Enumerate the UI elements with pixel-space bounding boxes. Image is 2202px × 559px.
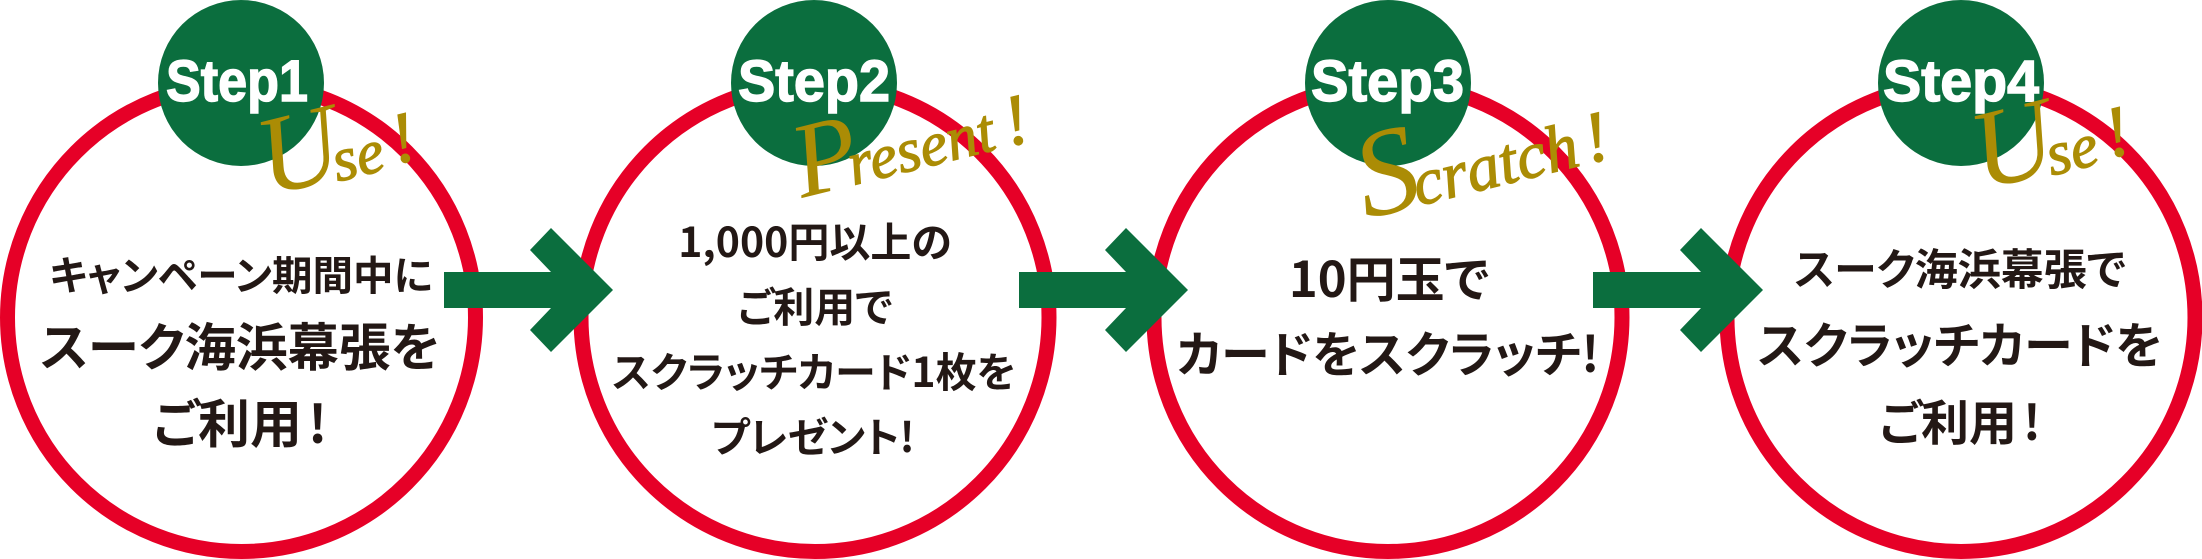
badge label: Step1: Step1: [166, 49, 308, 114]
panel: step 1: [8, 0, 476, 552]
panel: step 4: [1727, 0, 2195, 552]
body text 2: 1,000円以上の: [678, 209, 952, 269]
body text 3: カードをスクラッチ!: [1177, 316, 1599, 387]
body text 4: ご利用!: [1879, 384, 2041, 454]
script: Use!: U: [244, 79, 358, 220]
badge label: Step2: Step2: [738, 49, 890, 114]
red ring 2: [581, 84, 1049, 552]
body text 2: プレゼント!: [711, 404, 915, 464]
script: Use!: se: [324, 117, 391, 195]
red ring 1: [8, 84, 476, 552]
green badge 3: [1305, 0, 1471, 166]
green badge 1: [158, 0, 324, 166]
body text 1: スーク海浜幕張を: [40, 306, 440, 381]
green badge 2: [731, 0, 897, 166]
body text 3: [1177, 241, 1599, 387]
body text 4: スクラッチカードを: [1758, 307, 2162, 378]
script: Use!: !: [2095, 90, 2138, 173]
body text 2: スクラッチカード1枚を: [612, 339, 1016, 399]
script: Use!: se: [2038, 111, 2105, 189]
body text 4: [1758, 236, 2162, 454]
body text 1: キャンペーン期間中に: [49, 243, 433, 302]
body text 2: [612, 209, 1016, 464]
panel: step 3: [1154, 0, 1622, 552]
red ring 4: [1727, 84, 2195, 552]
body text 1: ご利用!: [153, 383, 327, 458]
body text 3: 10円玉で: [1289, 241, 1489, 312]
badge label: Step4: Step4: [1883, 49, 2039, 114]
script: Scratch!: Scratch!: [1339, 51, 1620, 245]
script: Use!: U: [1958, 73, 2072, 214]
body text 1: [40, 243, 440, 458]
body text 4: スーク海浜幕張で: [1794, 236, 2126, 298]
green badge 4: [1878, 0, 2044, 166]
arrow 2: [1019, 228, 1188, 352]
panel: step 2: [581, 0, 1049, 552]
body text 2: ご利用で: [738, 274, 892, 334]
arrow 1: [444, 228, 613, 352]
arrow 3: [1593, 228, 1763, 352]
script: Use!: !: [381, 96, 424, 179]
red ring 3: [1154, 84, 1622, 552]
badge label: Step3: Step3: [1311, 49, 1464, 114]
script: Present!: Present!: [778, 49, 1038, 221]
